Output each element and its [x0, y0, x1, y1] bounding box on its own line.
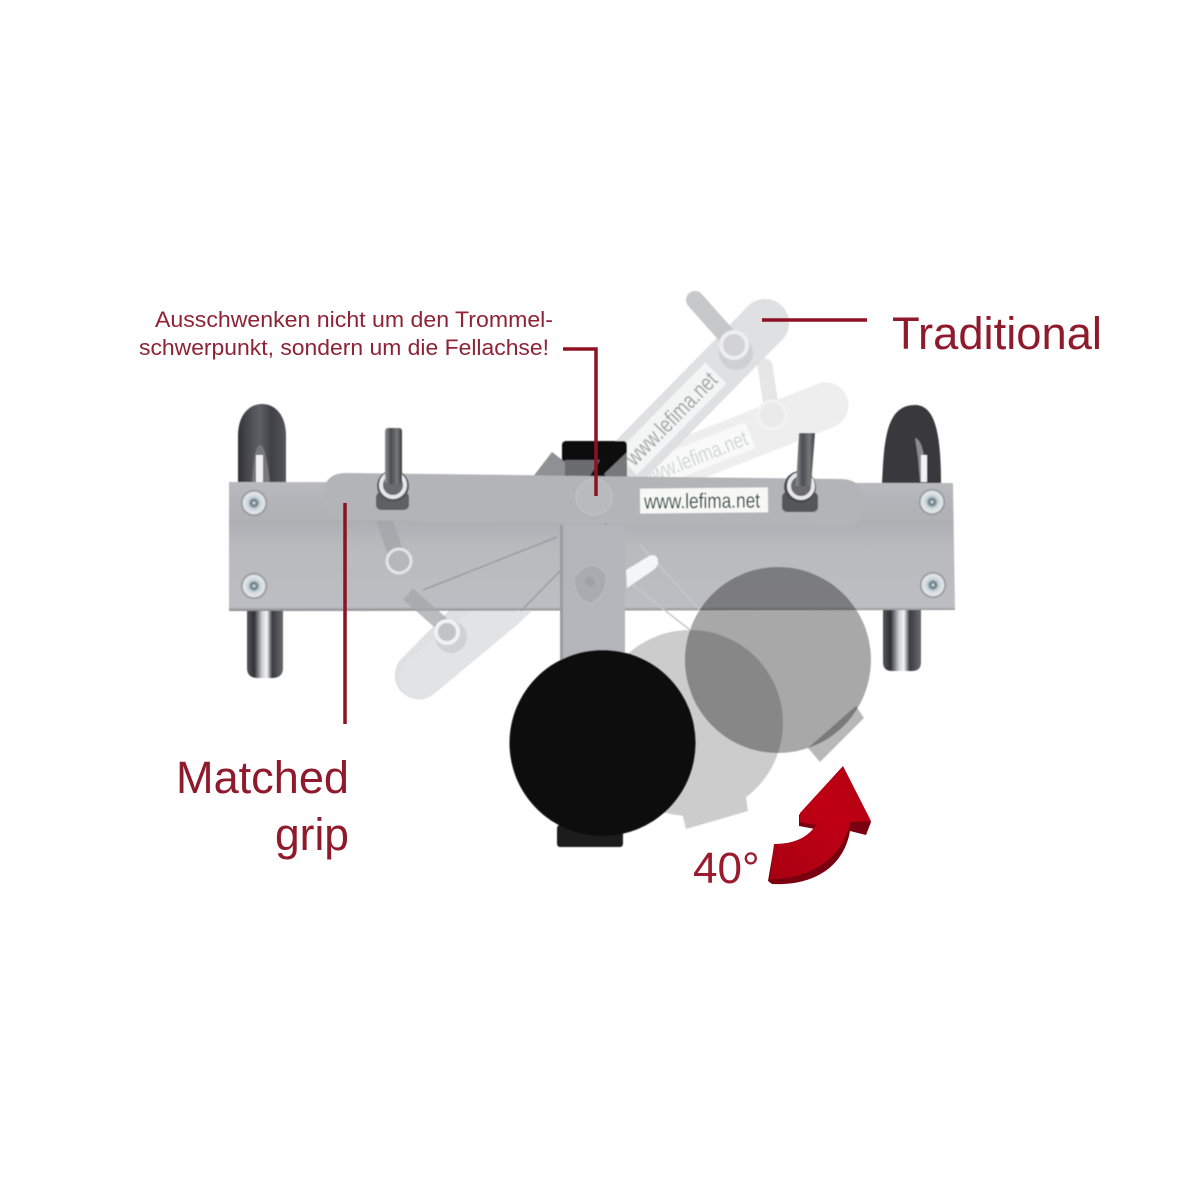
product photo: drum holder assembly: [229, 289, 955, 847]
ghost: traditional position arm one: www.lefima.net: [619, 366, 723, 471]
label: Matched grip: Matched: [176, 752, 349, 803]
label: Matched grip: grip: [275, 809, 349, 860]
ghost arm one lower end on white: [398, 594, 532, 700]
callout text: pivot explanation: [139, 307, 553, 360]
pivot point: [576, 479, 612, 515]
right wing bolt: [782, 433, 818, 512]
label: Matched grip: [176, 752, 349, 860]
adjustment slot: [626, 555, 658, 588]
callout text: pivot explanation: schwerpunkt, sondern um die Fellachse!: [139, 335, 549, 360]
leader line: matched grip: [343, 503, 347, 724]
right chrome handle: [882, 405, 941, 671]
faint ghost arm outlines on plate: [423, 523, 700, 630]
black drum pad with clamp tab: [510, 650, 696, 847]
label: Traditional: Traditional: [892, 308, 1102, 359]
ghost: traditional position arm two: www.lefima.net: [635, 425, 751, 491]
icon: red rotation arrow: [768, 766, 871, 884]
ghost drum pad, 40 degree position: [685, 567, 871, 762]
leader line: pivot callout: [563, 349, 596, 496]
ghost: traditional position arm one: [385, 289, 799, 709]
leader line: traditional: [762, 318, 867, 322]
left chrome handle: [238, 404, 286, 678]
callout text: pivot explanation: Ausschwenken nicht um den Trommel-: [155, 307, 553, 332]
ghost: traditional position arm two: [333, 366, 855, 619]
main grey mounting plate: [229, 482, 955, 611]
central vertical stem: [560, 525, 625, 665]
corner bolts: [241, 489, 946, 599]
ghost drum pad, mid position: [597, 630, 783, 829]
lefima label sticker: www.lefima.net: [643, 489, 760, 514]
rear black clamp block: [532, 441, 627, 498]
sliding top bar: [323, 473, 864, 527]
label: 40 degrees: 40°: [693, 844, 760, 893]
left wing bolt: [376, 428, 409, 510]
ghost arm two lower bolt: [381, 510, 411, 573]
